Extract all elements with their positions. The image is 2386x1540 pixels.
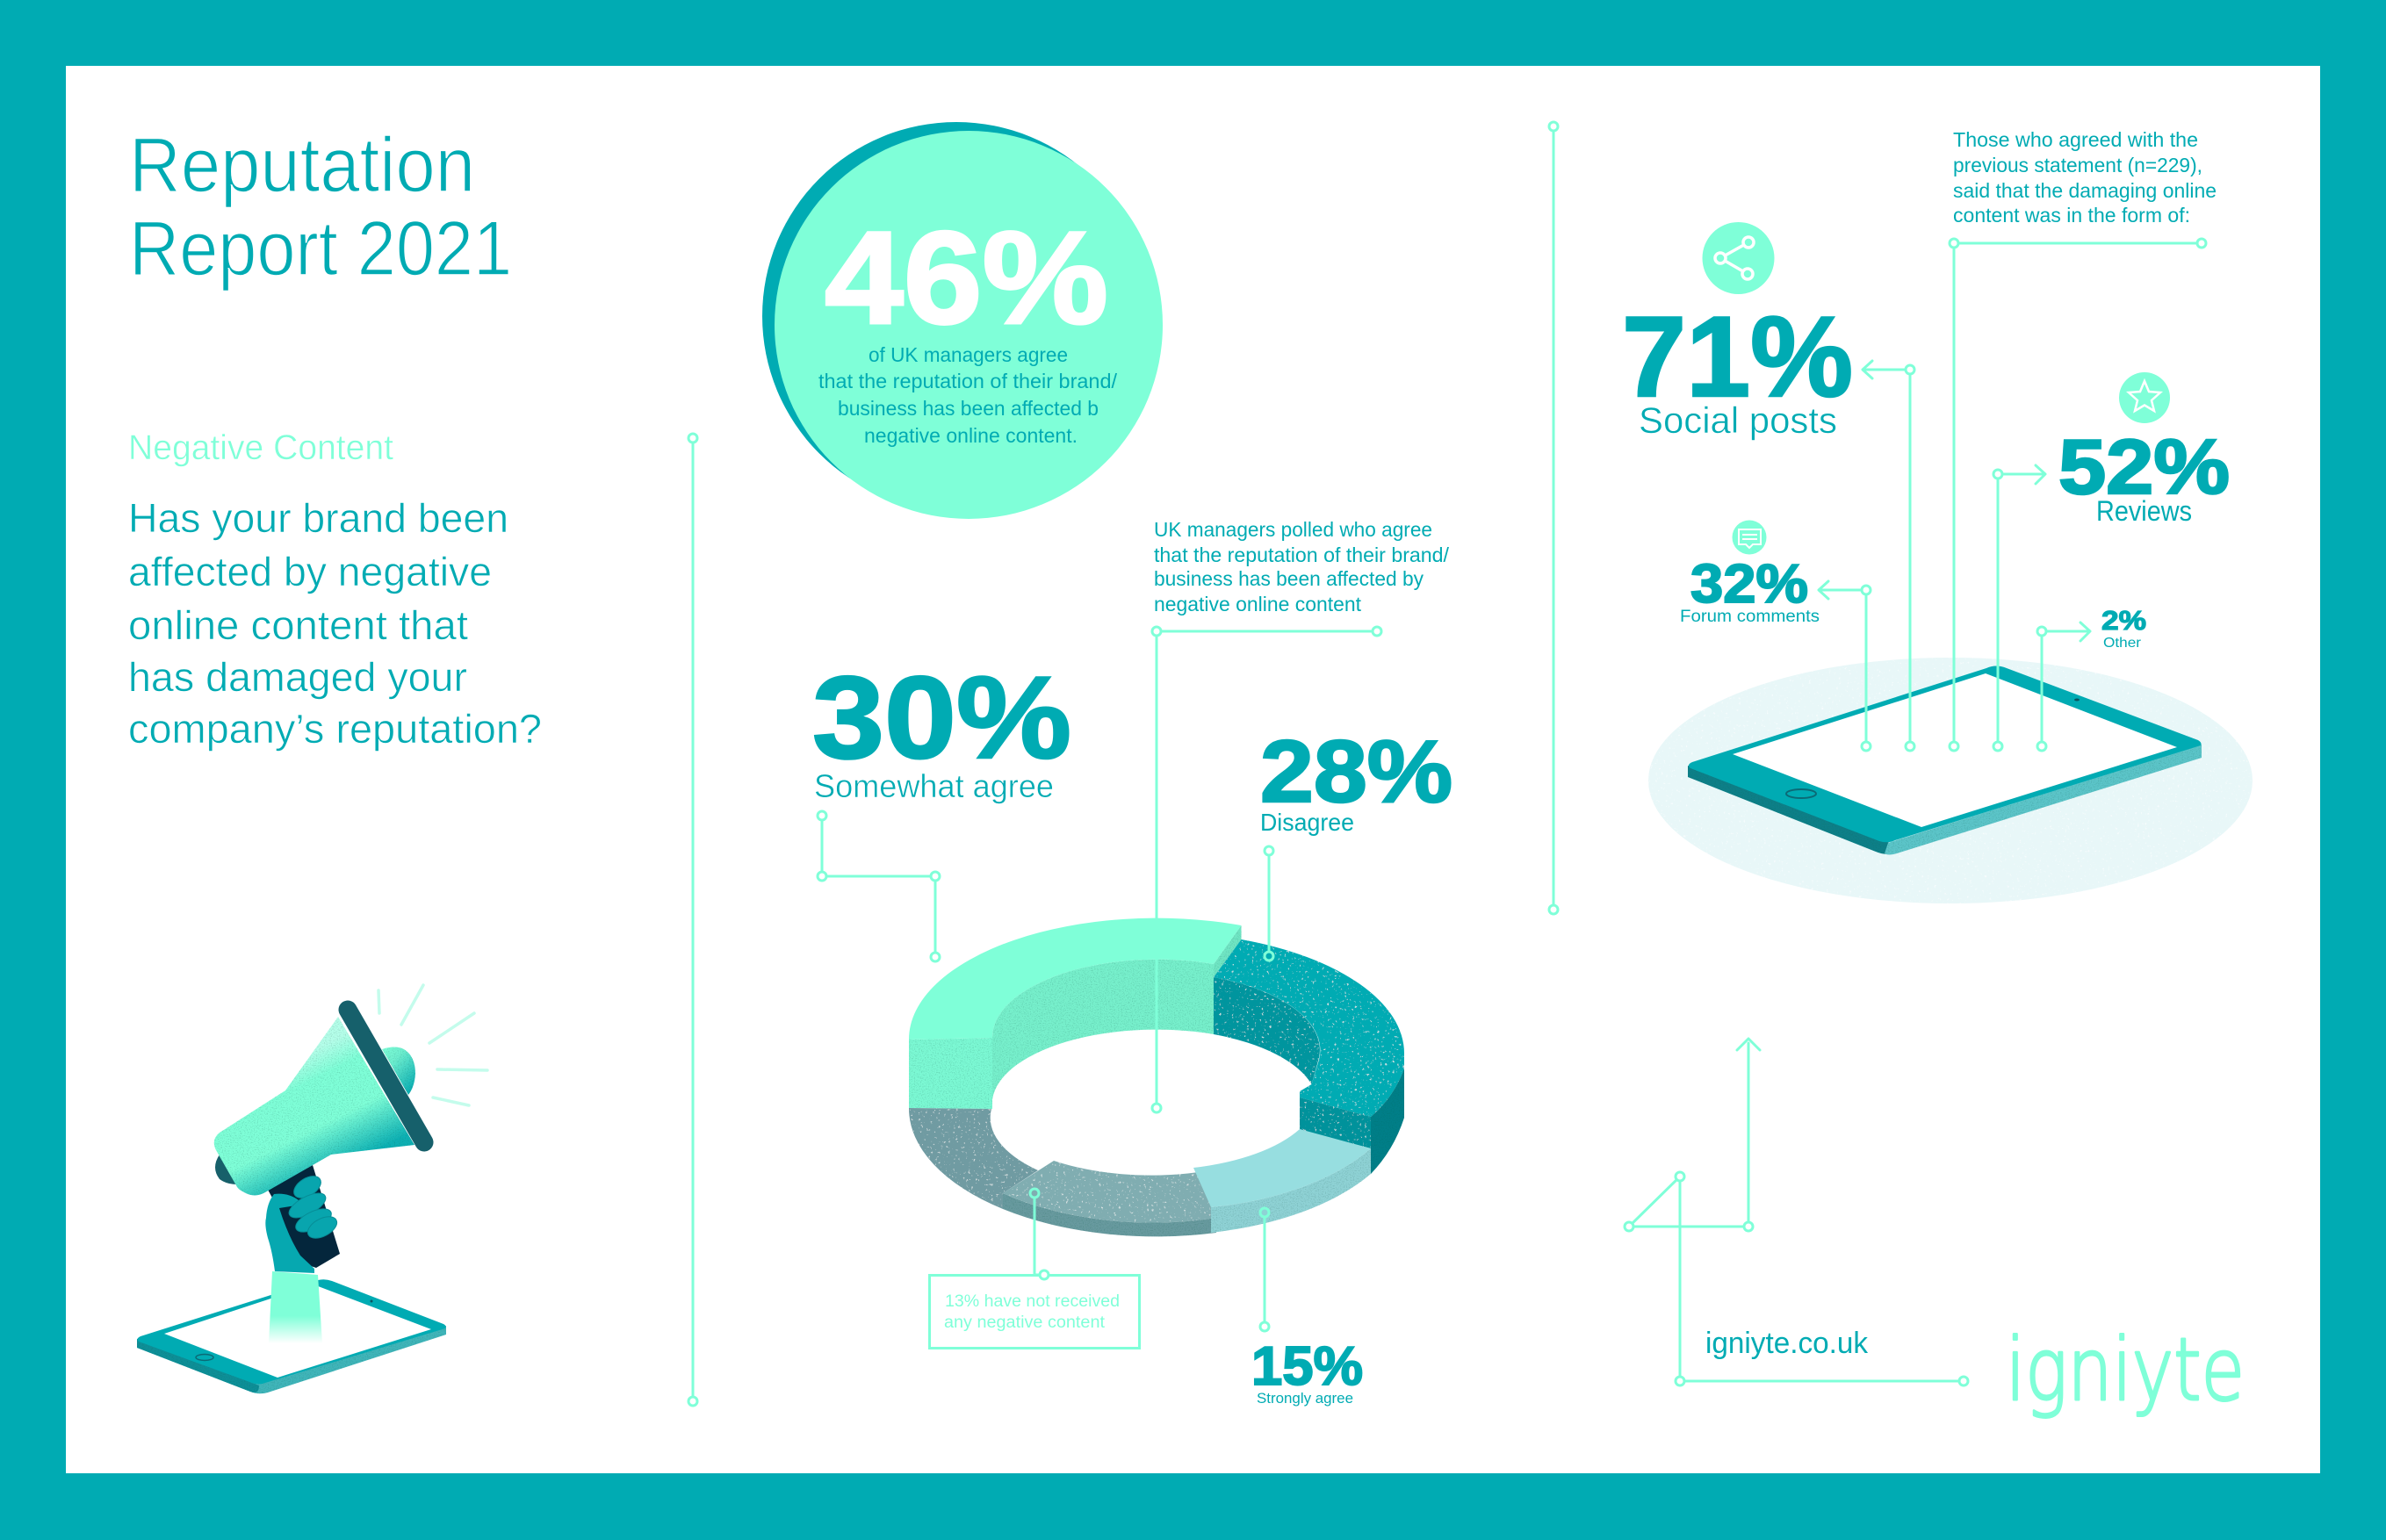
breakdown caption: Those who agreed with the (1953, 128, 2198, 151)
megaphone front dome (382, 1047, 415, 1095)
hand (265, 1172, 341, 1273)
megaphone body (214, 1017, 414, 1196)
decorative connector with arrow up (1625, 1039, 1968, 1385)
segment: strongly agree, pale teal (1193, 1129, 1371, 1233)
stat: 32% forum comments: 32% (1690, 554, 1808, 615)
survey question: Has your brand been (128, 495, 508, 541)
megaphone rim (348, 1010, 424, 1142)
vertical divider right (1549, 122, 1558, 914)
stat: 28% disagree: Disagree (1260, 809, 1354, 836)
donut caption (1154, 518, 1450, 615)
breakdown caption: said that the damaging online (1953, 179, 2217, 202)
connector: 30% (818, 811, 940, 961)
stat: 30% somewhat agree: 30% (812, 653, 1071, 783)
connector: caption to tablet (1950, 239, 2206, 751)
stat: 52% reviews: Reviews (2096, 495, 2192, 527)
stat: 71% social posts: 71% (1622, 292, 1853, 421)
circle caption: of UK managers agree (869, 343, 1068, 366)
website: igniyte.co.uk (1705, 1327, 1869, 1360)
circle caption: that the reputation of their brand/ (818, 370, 1118, 392)
handle (268, 1165, 340, 1268)
survey question: company’s reputation? (128, 706, 542, 752)
survey question (128, 495, 542, 752)
segment: somewhat agree, mint (909, 918, 1242, 1109)
title (129, 121, 512, 291)
illustration: megaphone held above tablet (137, 985, 487, 1393)
pale ellipse under tablet (1648, 658, 2253, 903)
stat: 32% forum comments (1680, 554, 1820, 626)
callout box: 13%: 13% have not received (945, 1292, 1120, 1311)
stat: 2% other (2101, 605, 2146, 651)
big number: 46% (825, 204, 1108, 351)
survey question: affected by negative (128, 549, 492, 594)
sleeve cuff (269, 1271, 322, 1343)
breakdown caption: content was in the form of: (1953, 204, 2190, 227)
arrow: 2% (2037, 622, 2090, 751)
large tablet (1688, 666, 2202, 855)
survey question: has damaged your (128, 654, 467, 700)
icon: share (1702, 222, 1774, 294)
sound lines (378, 985, 487, 1105)
stat: 71% social posts: Social posts (1639, 399, 1837, 441)
arrow: 32% (1819, 581, 1871, 751)
breakdown caption: previous statement (n=229), (1953, 154, 2202, 176)
connector: 28% (1265, 846, 1273, 961)
stat: 52% reviews: 52% (2058, 423, 2230, 510)
circle caption: negative online content. (864, 424, 1078, 447)
donut caption: that the reputation of their brand/ (1154, 543, 1450, 566)
breakdown caption (1953, 128, 2217, 227)
segment: disagree, teal (1214, 939, 1404, 1174)
callout box: 13%: any negative content (944, 1313, 1106, 1332)
callout box: 13% (929, 1275, 1140, 1349)
circle caption (818, 343, 1118, 447)
icon: forum comment (1732, 520, 1767, 555)
connector: 15% (1260, 1208, 1269, 1331)
stat: 30% somewhat agree: Somewhat agree (814, 768, 1054, 804)
megaphone back cap (215, 1155, 237, 1184)
donut caption: negative online content (1154, 593, 1362, 615)
circle caption: business has been affected b (838, 397, 1099, 420)
survey question: online content that (128, 602, 468, 648)
stat: 2% other: 2% (2101, 605, 2146, 636)
headline circle 46% (762, 122, 1163, 519)
donut caption: business has been affected by (1154, 567, 1424, 590)
logo: igniyte: igniyte (2006, 1321, 2245, 1421)
icon: star (2119, 372, 2170, 423)
circle shadow (762, 122, 1150, 510)
arrow: 52% (1993, 465, 2045, 751)
stat: 32% forum comments: Forum comments (1680, 608, 1820, 626)
segment: no negative content, dark grey-teal (909, 1108, 1038, 1209)
vertical divider left (688, 434, 697, 1406)
title: Report 2021 (129, 205, 512, 291)
small tablet (137, 1279, 446, 1393)
segment: remaining, grey-teal (1003, 1161, 1216, 1236)
stat: 28% disagree: 28% (1260, 723, 1453, 821)
title: Reputation (129, 121, 475, 208)
stat: 2% other: Other (2103, 636, 2142, 651)
connector: 13% (1030, 1189, 1049, 1279)
stat: 15% strongly agree: Strongly agree (1257, 1390, 1353, 1407)
donut caption: UK managers polled who agree (1154, 518, 1432, 541)
3D donut chart (909, 918, 1404, 1236)
circle face (775, 131, 1163, 519)
section label: negative content: Negative Content (128, 428, 393, 467)
arrow: 71% (1863, 361, 1914, 751)
connector: donut centre to caption (1152, 627, 1381, 1112)
stat: 15% strongly agree: 15% (1251, 1336, 1363, 1397)
